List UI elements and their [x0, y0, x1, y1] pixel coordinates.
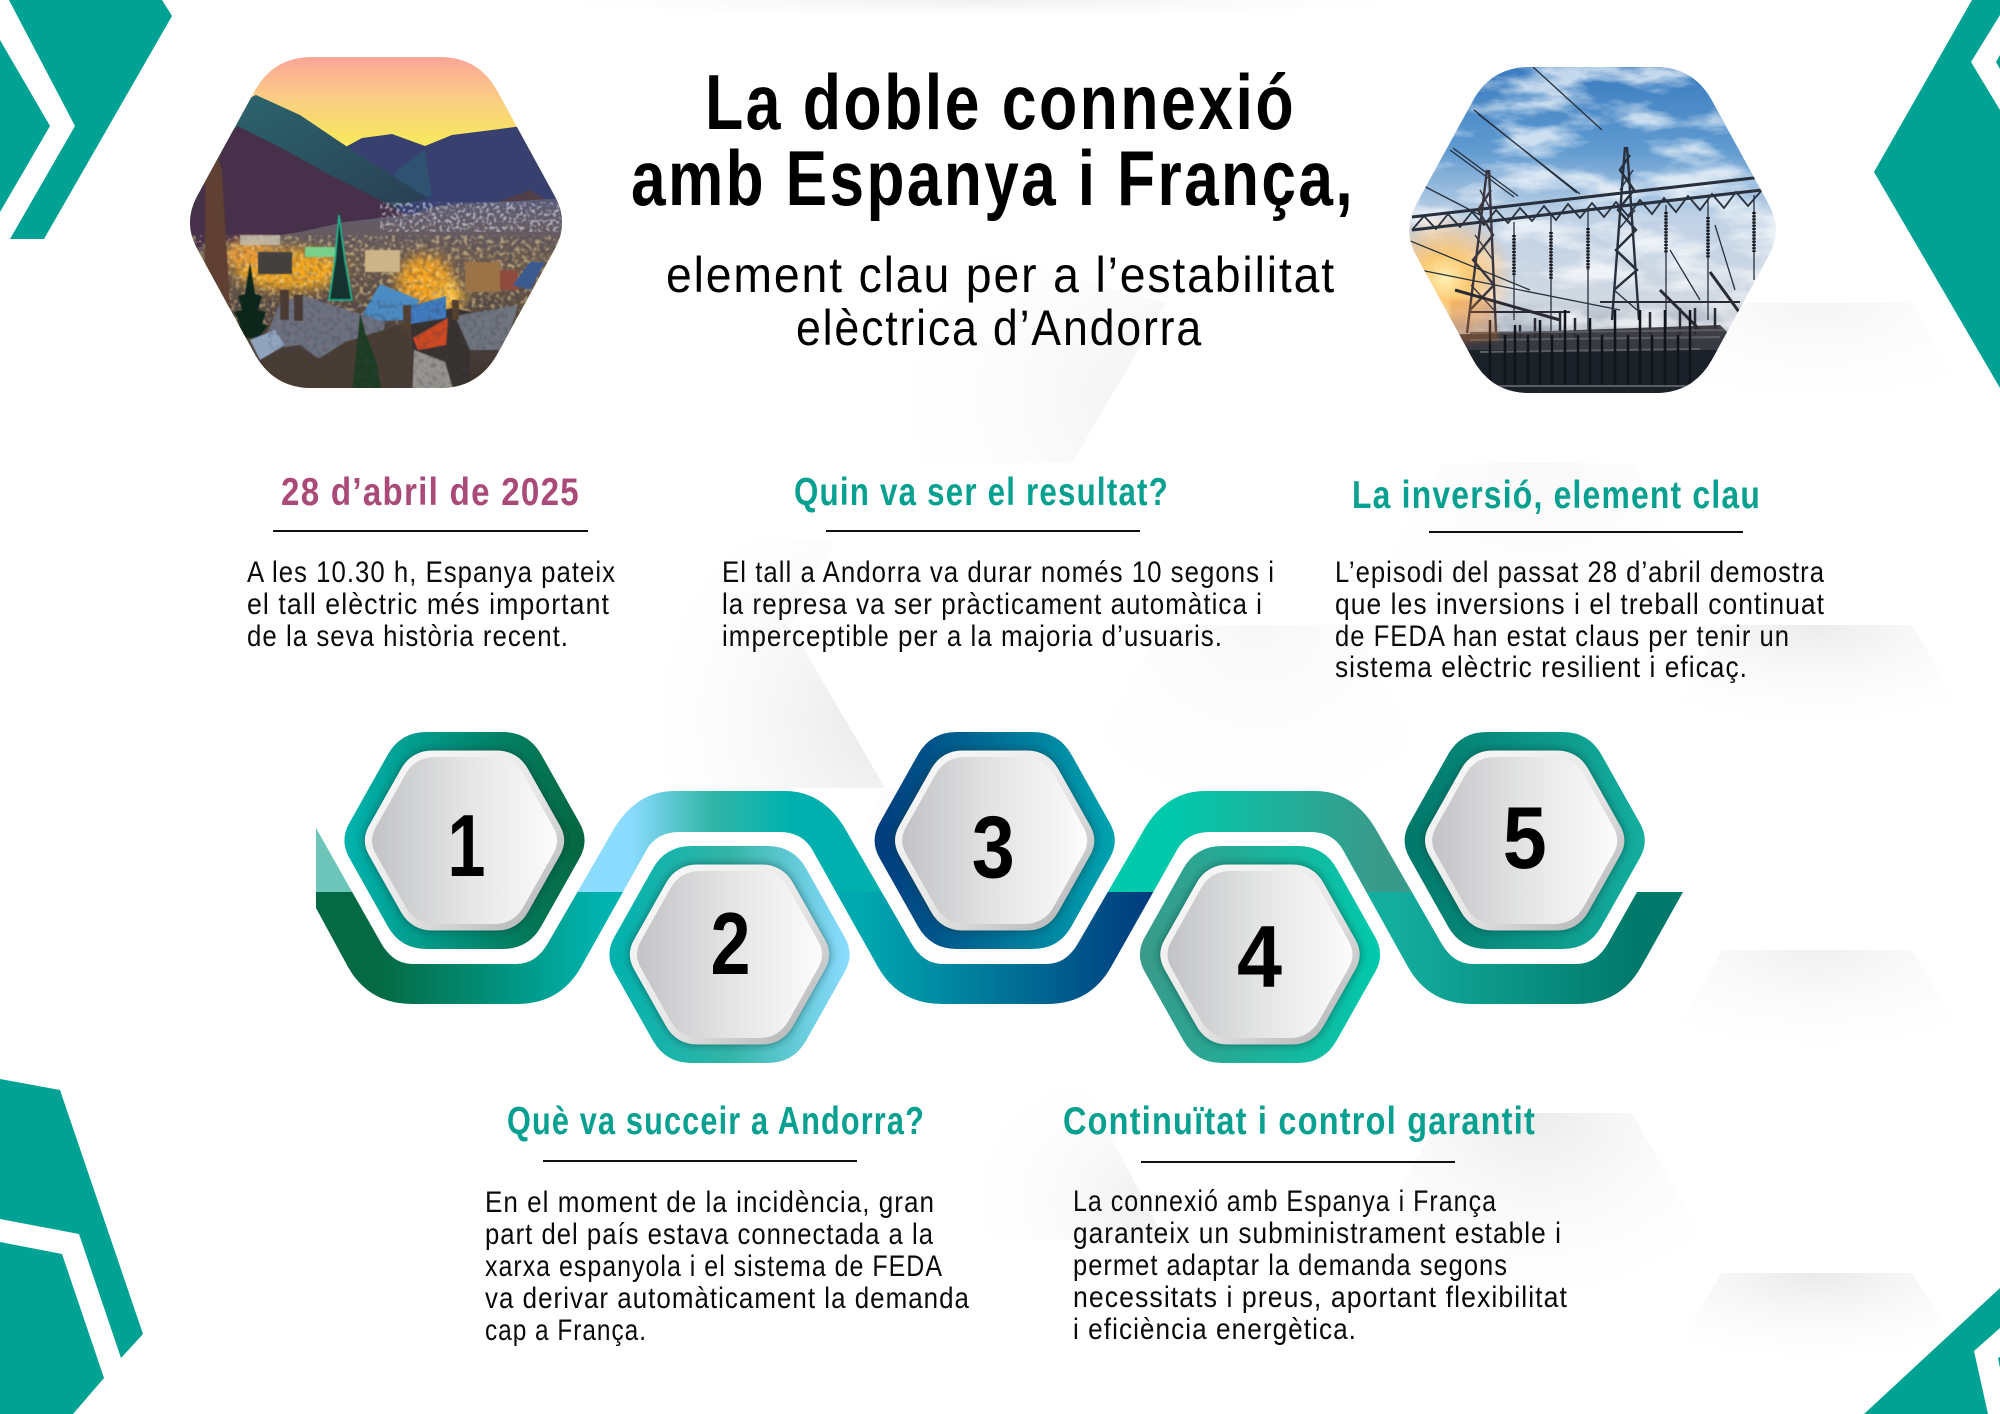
text block: La inversió, element clau: de FEDA han estat claus per tenir un: [1335, 620, 1790, 653]
text block: Quin va ser el resultat?: imperceptible per a la majoria d’usuaris.: [722, 620, 1223, 653]
corner shape: bottom right: [1864, 1288, 2000, 1414]
text block: Què va succeir a Andorra?: cap a França.: [485, 1314, 647, 1347]
photo: Andorra la Vella at dusk: [190, 57, 562, 388]
background hexagon pattern: [580, 0, 2000, 1414]
text block: Què va succeir a Andorra?: xarxa espanyola i el sistema de FEDA: [485, 1250, 943, 1283]
text block: Quin va ser el resultat?: la represa va ser pràcticament automàtica i: [722, 588, 1263, 621]
subtitle: element clau per a l’estabilitat: [666, 247, 1336, 303]
step 2 badge: [609, 846, 850, 1063]
text block: Continuïtat i control garantit: garanteix un subministrament estable i: [1073, 1217, 1562, 1250]
text block: 28 d'abril de 2025: el tall elèctric més important: [247, 588, 610, 621]
title: [631, 58, 1355, 222]
text block: Continuïtat i control garantit: necessitats i preus, aportant flexibilitat: [1073, 1281, 1568, 1314]
step 3 badge: 3: [972, 798, 1015, 896]
ribbon connecting the steps: [300, 780, 1690, 1012]
step 4 badge: 4: [1237, 907, 1282, 1006]
text block: Continuïtat i control garantit: [1063, 1100, 1568, 1346]
text block: 28 d'abril de 2025: 28 d’abril de 2025: [281, 471, 580, 514]
text block: 28 d'abril de 2025: de la seva història recent.: [247, 620, 569, 653]
step 5 badge: 5: [1503, 788, 1547, 887]
text block: Què va succeir a Andorra?: En el moment de la incidència, gran: [485, 1186, 935, 1219]
subtitle: [666, 247, 1336, 356]
text block: Quin va ser el resultat?: El tall a Andorra va durar només 10 segons i: [722, 556, 1275, 589]
step 4 badge: [1140, 846, 1380, 1063]
subtitle: elèctrica d’Andorra: [796, 300, 1203, 356]
step 2 badge: 2: [710, 894, 750, 993]
text block: Què va succeir a Andorra?: part del país estava connectada a la: [485, 1218, 934, 1251]
text block: La inversió, element clau: [1335, 474, 1825, 684]
text block: La inversió, element clau: La inversió, element clau: [1352, 474, 1761, 517]
corner shape: top left: [0, 0, 172, 239]
text block: Continuïtat i control garantit: i eficiència energètica.: [1073, 1313, 1357, 1346]
title: La doble connexió: [705, 58, 1296, 146]
title: amb Espanya i França,: [631, 134, 1355, 222]
text block: Continuïtat i control garantit: permet adaptar la demanda segons: [1073, 1249, 1508, 1282]
corner shape: bottom left: [0, 1079, 143, 1414]
text block: Quin va ser el resultat?: [722, 471, 1275, 653]
text block: Quin va ser el resultat?: Quin va ser el resultat?: [794, 471, 1169, 514]
text block: 28 d'abril de 2025: [247, 471, 616, 653]
step 1 badge: 1: [448, 796, 486, 895]
text block: Continuïtat i control garantit: La connexió amb Espanya i França: [1073, 1185, 1497, 1218]
text block: Què va succeir a Andorra?: va derivar automàticament la demanda: [485, 1282, 970, 1315]
text block: Què va succeir a Andorra?: [485, 1100, 970, 1347]
text block: La inversió, element clau: L’episodi del passat 28 d’abril demostra: [1335, 556, 1825, 589]
text block: 28 d'abril de 2025: A les 10.30 h, Espanya pateix: [247, 556, 616, 589]
corner shape: top right: [1874, 0, 2000, 388]
text block: Continuïtat i control garantit: Continuïtat i control garantit: [1063, 1100, 1536, 1143]
text block: La inversió, element clau: sistema elèctric resilient i eficaç.: [1335, 651, 1748, 684]
step 3 badge: [875, 732, 1115, 949]
text block: Què va succeir a Andorra?: Què va succeir a Andorra?: [507, 1100, 925, 1143]
step 5 badge: [1405, 732, 1645, 949]
photo: electrical substation at sunset: [1409, 67, 1776, 393]
text block: La inversió, element clau: que les inversions i el treball continuat: [1335, 588, 1825, 621]
step 1 badge: [344, 732, 585, 949]
